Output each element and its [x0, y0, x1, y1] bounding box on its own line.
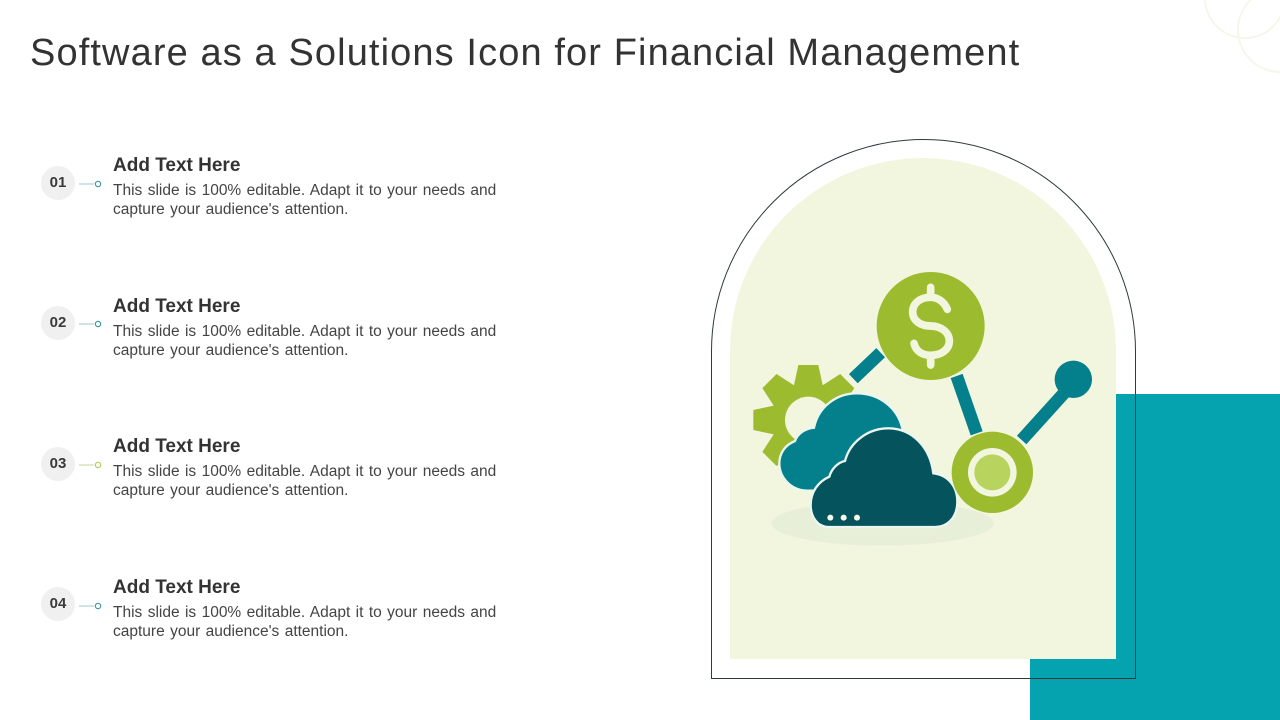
- badge 01: [41, 166, 75, 200]
- badge 02: 02: [50, 314, 66, 331]
- heading 03: Add Text Here: [113, 436, 240, 457]
- icon: gear: [753, 365, 863, 475]
- text 01: This slide is 100% editable. Adapt it to your needs and: [113, 182, 496, 199]
- list item 01: [41, 155, 496, 218]
- badge 03: 03: [50, 455, 66, 472]
- heading 04: Add Text Here: [113, 577, 240, 598]
- ground shadow: [772, 501, 994, 546]
- text 01: capture your audience's attention.: [113, 201, 348, 218]
- text 01: [113, 182, 496, 218]
- heading 01: Add Text Here: [113, 155, 240, 176]
- teal background block: [1030, 394, 1280, 720]
- list item 03: [41, 436, 496, 499]
- decorative circles: [1204, 0, 1280, 73]
- heading 02: Add Text Here: [113, 296, 240, 317]
- text 03: capture your audience's attention.: [113, 482, 348, 499]
- list item 04: [41, 577, 496, 640]
- connector 02: [79, 320, 102, 328]
- connector lines: [853, 353, 1068, 440]
- text 03: This slide is 100% editable. Adapt it to your needs and: [113, 463, 496, 480]
- text 03: [113, 463, 496, 499]
- text 02: [113, 323, 496, 359]
- badge 02: [41, 306, 75, 340]
- badge 04: [41, 587, 75, 621]
- icon: front cloud: [811, 428, 957, 527]
- icon: cloud finance network: [753, 272, 1092, 546]
- connector 01: [79, 180, 102, 188]
- pale green arch panel: [730, 158, 1116, 659]
- icon: target node: [952, 432, 1033, 513]
- text 04: [113, 604, 496, 640]
- text 02: This slide is 100% editable. Adapt it to your needs and: [113, 323, 496, 340]
- badge 04: 04: [50, 595, 66, 612]
- cloud dots: [827, 515, 860, 521]
- text 04: capture your audience's attention.: [113, 623, 348, 640]
- connector 03: [79, 462, 102, 468]
- text 04: This slide is 100% editable. Adapt it to your needs and: [113, 604, 496, 621]
- icon: dollar coin: [877, 272, 985, 380]
- badge 01: 01: [50, 174, 66, 191]
- text 02: capture your audience's attention.: [113, 342, 348, 359]
- title: Software as a Solutions Icon for Financial Management: [30, 32, 1020, 74]
- connector 04: [79, 602, 102, 610]
- arch outline: [712, 140, 1136, 679]
- badge 03: [41, 447, 75, 481]
- icon: end node: [1055, 361, 1092, 398]
- icon: back cloud: [779, 393, 903, 491]
- list item 02: [41, 296, 496, 359]
